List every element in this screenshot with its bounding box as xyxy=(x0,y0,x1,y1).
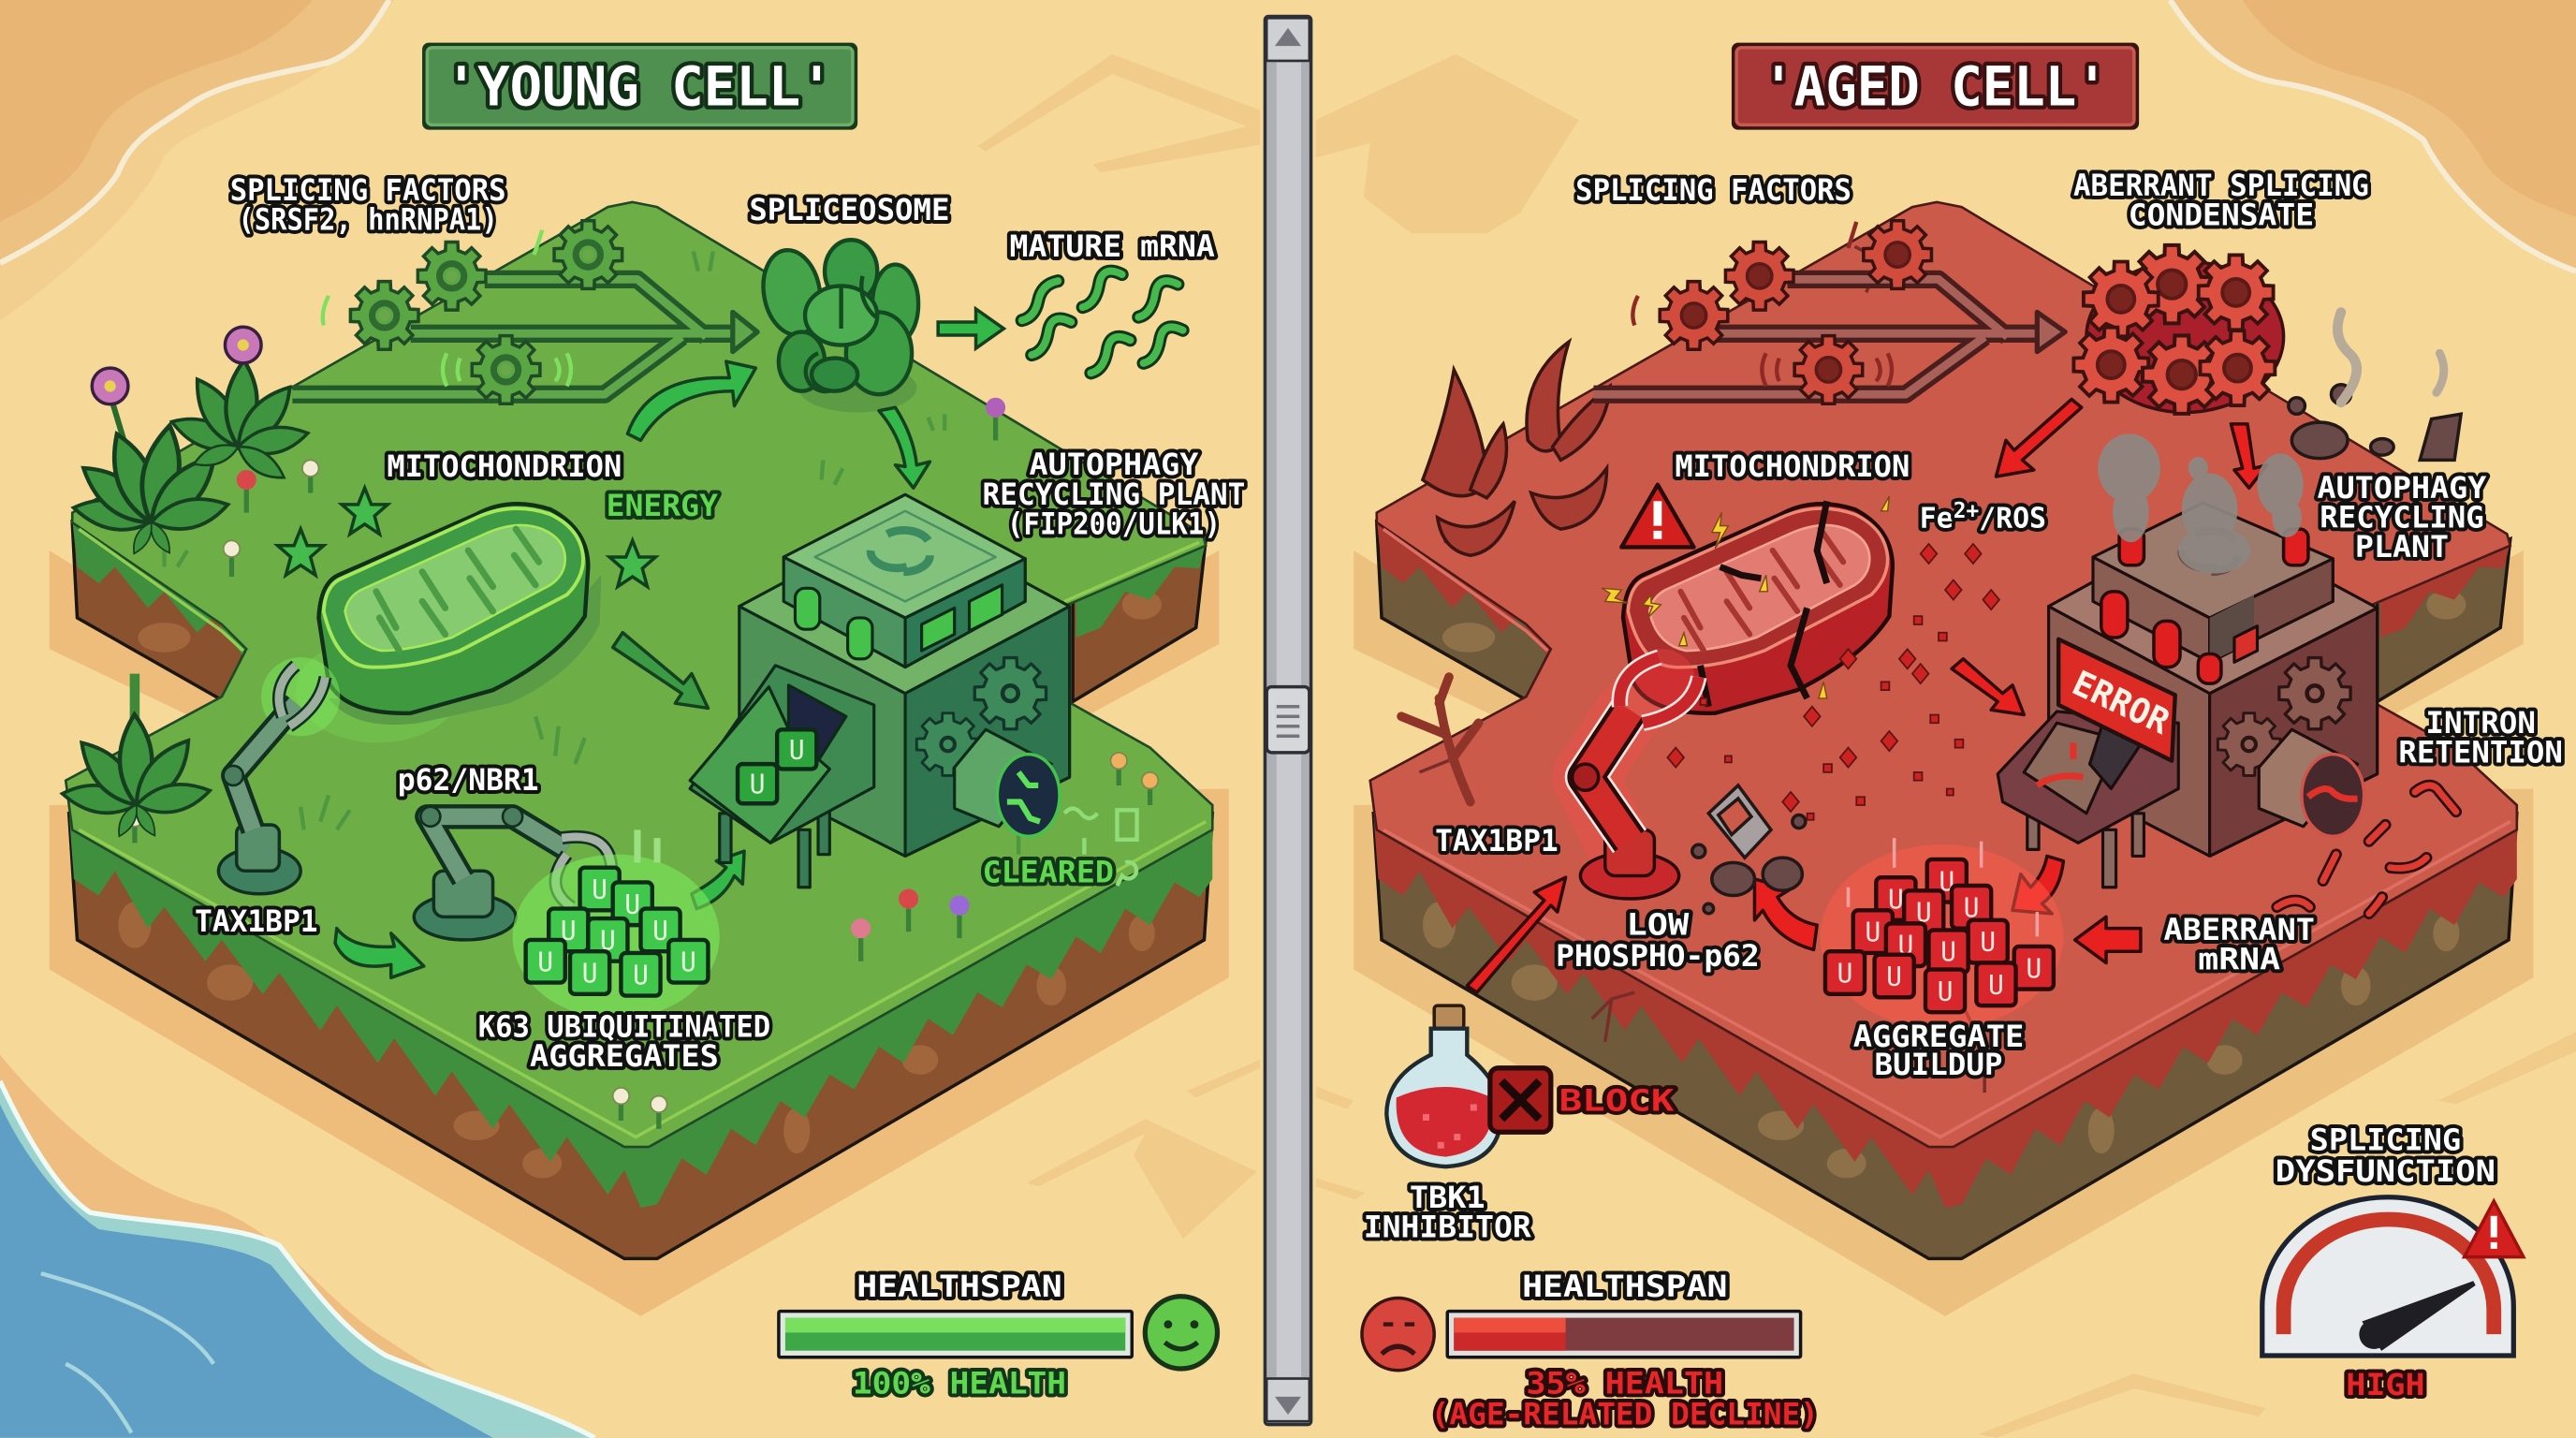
k63 ubiquitinated aggregates: U xyxy=(600,925,616,956)
aggregate buildup: U xyxy=(1897,931,1913,961)
label: splicing factors (young): SPLICING FACTORS xyxy=(230,172,506,208)
label: autophagy recycling plant (young): RECYCLING PLANT xyxy=(983,477,1245,512)
ROS particles xyxy=(1667,544,1999,820)
chute xyxy=(1998,712,2178,843)
panel: aged cell island xyxy=(1354,202,2533,1316)
label: 35% health: (AGE-RELATED DECLINE) xyxy=(1431,1397,1819,1432)
smoke wisps xyxy=(2337,312,2444,403)
label: Fe2+/ROS: /ROS xyxy=(1979,502,2046,535)
arrows: red flow xyxy=(1467,399,2267,992)
withered plants xyxy=(1423,342,1610,555)
aggregate buildup xyxy=(1821,838,2063,1029)
recessed dark smudge xyxy=(2210,594,2254,662)
chute xyxy=(690,666,874,843)
label: k63 aggregates: AGGREGATES xyxy=(530,1038,719,1074)
sad face xyxy=(1362,1299,1434,1371)
aggregate buildup: U xyxy=(1888,885,1904,916)
health bar xyxy=(777,1310,1134,1358)
label: low phospho-p62: LOW xyxy=(1627,907,1690,943)
label: Fe2+/ROS: 2+ xyxy=(1954,499,1979,523)
smoke clouds xyxy=(2098,433,2304,574)
plant cluster: upper left xyxy=(71,327,310,556)
title banner: aged cell: 'AGED CELL' xyxy=(1763,54,2108,118)
panel: young cell island xyxy=(50,202,1229,1316)
label: aberrant mRNA: mRNA xyxy=(2198,942,2281,977)
label: low phospho-p62 xyxy=(1556,907,1760,974)
ocean xyxy=(0,1055,594,1438)
k63 ubiquitinated aggregates: U xyxy=(633,960,649,990)
title banner: young cell: 'YOUNG CELL' xyxy=(446,54,833,118)
mitochondrion xyxy=(296,504,601,742)
legs xyxy=(720,805,829,888)
error sign: ERROR xyxy=(2066,663,2176,742)
label: healthspan: HEALTHSPAN xyxy=(1522,1269,1727,1304)
label: TAX1BP1 (young): TAX1BP1 xyxy=(195,903,318,939)
label: intron retention xyxy=(2398,705,2563,770)
label: splicing factors (young) xyxy=(230,172,506,238)
label: aberrant mRNA: ABERRANT xyxy=(2163,912,2315,947)
label: autophagy recycling plant (young): (FIP200/ULK1) xyxy=(1007,506,1221,541)
lamps: red warning lights xyxy=(2101,529,2308,683)
robot arm: TAX1BP1 (aged) xyxy=(1573,657,1699,899)
happy face xyxy=(1145,1297,1218,1369)
label: Fe2+/ROS: Fe xyxy=(1920,502,1954,535)
label: TBK1 inhibitor: INHIBITOR xyxy=(1364,1210,1531,1245)
label: high: HIGH xyxy=(2346,1367,2425,1402)
top-left shore xyxy=(0,0,394,320)
label: mitochondrion (young): MITOCHONDRION xyxy=(387,448,622,484)
aggregate buildup: U xyxy=(1837,959,1852,990)
k63 ubiquitinated aggregates: U xyxy=(624,889,640,920)
aggregate buildup: U xyxy=(1939,866,1954,897)
k63 ubiquitinated aggregates: U xyxy=(652,916,668,946)
robot arm: p62/NBR1 xyxy=(414,807,611,940)
warning triangle xyxy=(1621,485,1694,547)
label: aberrant splicing condensate: CONDENSATE xyxy=(2129,197,2314,232)
label: aberrant splicing condensate xyxy=(2073,168,2369,232)
potion: TBK1 inhibitor xyxy=(1386,1005,1501,1167)
label: aggregate buildup: AGGREGATE xyxy=(1853,1019,2024,1054)
recycled cubes xyxy=(738,729,816,803)
sparks xyxy=(1602,496,1889,698)
label: block: BLOCK xyxy=(1559,1082,1675,1118)
aggregate buildup: U xyxy=(1916,898,1932,929)
k63 ubiquitinated aggregates: U xyxy=(592,874,607,905)
label: 100% health: 100% HEALTH xyxy=(853,1365,1066,1401)
recycled cubes: U xyxy=(789,735,805,766)
label: splicing dysfunction: DYSFUNCTION xyxy=(2276,1153,2496,1189)
label: mature mRNA: MATURE mRNA xyxy=(1010,228,1215,264)
cleared residue xyxy=(1063,809,1137,886)
label: TBK1 inhibitor xyxy=(1364,1180,1531,1245)
legs xyxy=(2027,814,2144,888)
soil patches xyxy=(118,590,1162,1178)
grass side band xyxy=(69,520,1212,1208)
label: aggregate buildup xyxy=(1853,1019,2024,1082)
aggregate buildup: U xyxy=(1938,976,1953,1007)
aggregate buildup: U xyxy=(2026,953,2042,984)
label: spliceosome: SPLICEOSOME xyxy=(749,192,949,227)
k63 ubiquitinated aggregates: U xyxy=(561,916,577,946)
label: splicing factors (aged): SPLICING FACTORS xyxy=(1575,172,1852,208)
scroll button up xyxy=(1266,18,1310,61)
label: 35% health xyxy=(1431,1365,1819,1432)
rocks (aged, top right) xyxy=(2289,385,2461,460)
label: aberrant splicing condensate: ABERRANT SPLICING xyxy=(2073,168,2369,203)
label: autophagy recycling plant (aged) xyxy=(2318,470,2487,565)
dead tree xyxy=(1401,677,1479,801)
aggregate buildup: U xyxy=(1886,961,1902,992)
red ground top xyxy=(1370,202,2517,1147)
grass top xyxy=(66,202,1212,1147)
health bar xyxy=(1445,1310,1802,1358)
label: mitochondrion (aged): MITOCHONDRION xyxy=(1675,448,1910,484)
k63 ubiquitinated aggregates xyxy=(513,829,720,1019)
label: autophagy recycling plant (young) xyxy=(983,447,1245,541)
rim highlight xyxy=(79,529,1206,1137)
k63 ubiquitinated aggregates: U xyxy=(681,946,696,977)
gears on the side xyxy=(2217,658,2350,775)
label: healthspan: HEALTHSPAN xyxy=(856,1269,1062,1304)
broken parts and rocks xyxy=(1692,785,1806,914)
pipes: aberrant splicing xyxy=(1593,279,2065,394)
scroll button down xyxy=(1266,1379,1310,1421)
plant: lower left xyxy=(60,674,212,839)
soil patches xyxy=(1423,590,2466,1178)
label: aggregate buildup: BUILDUP xyxy=(1875,1047,2002,1082)
label: k63 aggregates xyxy=(478,1008,770,1074)
label: energy: ENERGY xyxy=(607,488,718,523)
block icon xyxy=(1490,1068,1551,1132)
label: TAX1BP1 (aged): TAX1BP1 xyxy=(1435,823,1559,858)
energy stars xyxy=(278,488,655,587)
mature mRNA strands xyxy=(1022,271,1183,373)
label: autophagy recycling plant (aged): PLANT xyxy=(2355,529,2449,565)
arrows: green flow xyxy=(335,361,929,977)
label: aberrant mRNA xyxy=(2163,912,2315,977)
recycled cubes: U xyxy=(750,770,766,800)
label: autophagy recycling plant (young): AUTOPHAGY xyxy=(1030,447,1199,482)
title banner: young cell xyxy=(422,43,857,130)
aggregate buildup: U xyxy=(1980,927,1996,958)
k63 ubiquitinated aggregates: U xyxy=(582,959,598,990)
label: TBK1 inhibitor: TBK1 xyxy=(1410,1180,1486,1215)
aggregate buildup: U xyxy=(1940,937,1956,968)
label: splicing factors (young): (SRSF2, hnRNPA1) xyxy=(238,202,498,238)
grass tufts and small flowers xyxy=(126,252,1158,1129)
label: splicing dysfunction: SPLICING xyxy=(2310,1123,2461,1158)
healthspan meter: young xyxy=(777,1269,1218,1401)
pipes: splicing pathways xyxy=(292,279,757,394)
label: p62/NBR1: p62/NBR1 xyxy=(398,762,539,798)
aggregate buildup: U xyxy=(1964,892,1980,923)
title banner: aged cell xyxy=(1732,43,2139,130)
side band xyxy=(1373,520,2517,1208)
scroll thumb xyxy=(1266,687,1310,753)
error sign xyxy=(2058,639,2176,761)
label: autophagy recycling plant (aged): AUTOPHAGY xyxy=(2318,470,2487,506)
healthspan meter: aged xyxy=(1362,1269,1819,1432)
aggregate buildup: U xyxy=(1865,917,1881,948)
label: intron retention: INTRON xyxy=(2425,705,2536,741)
label: low phospho-p62: PHOSPHO-p62 xyxy=(1556,938,1760,974)
rim highlight xyxy=(1383,529,2510,1137)
soil xyxy=(69,522,1212,1258)
scrollbar divider xyxy=(1264,15,1312,1426)
machine: autophagy recycling plant (young) xyxy=(690,494,1070,888)
robot arm: TAX1BP1 (young) xyxy=(218,657,340,894)
aberrant splicing condensate xyxy=(2073,245,2284,414)
label: splicing dysfunction xyxy=(2276,1123,2496,1189)
sand dunes xyxy=(977,54,2576,1438)
spliceosome xyxy=(757,240,918,413)
gauge: splicing dysfunction xyxy=(2262,1197,2524,1356)
top-right shore xyxy=(2170,0,2576,271)
label: cleared: CLEARED xyxy=(983,854,1114,889)
output pipe xyxy=(2259,729,2358,827)
mitochondrion (damaged) xyxy=(1623,501,1893,713)
gears on the side xyxy=(916,658,1046,775)
ground cracks xyxy=(1419,243,1984,1093)
aggregate buildup: U xyxy=(1988,970,2004,1001)
arrow: to mature mRNA xyxy=(938,309,1003,348)
splicing factor gears xyxy=(323,221,622,404)
aberrant mRNA fragments xyxy=(2277,785,2456,914)
machine: autophagy recycling plant (aged) xyxy=(1998,503,2378,888)
island shadow xyxy=(1354,550,2533,1316)
output pipe xyxy=(955,729,1051,827)
label: autophagy recycling plant (aged): RECYCLING xyxy=(2320,499,2484,535)
label: k63 aggregates: K63 UBIQUITINATED xyxy=(478,1008,770,1044)
k63 ubiquitinated aggregates: U xyxy=(537,946,553,977)
label: intron retention: RETENTION xyxy=(2398,734,2563,770)
control lights xyxy=(795,585,1003,659)
gauge warning icon xyxy=(2465,1201,2524,1257)
splicing factor gears (aged) xyxy=(1632,221,1931,404)
label: 35% health: 35% HEALTH xyxy=(1526,1365,1723,1401)
soil xyxy=(1373,522,2517,1258)
island shadow xyxy=(50,550,1229,1316)
